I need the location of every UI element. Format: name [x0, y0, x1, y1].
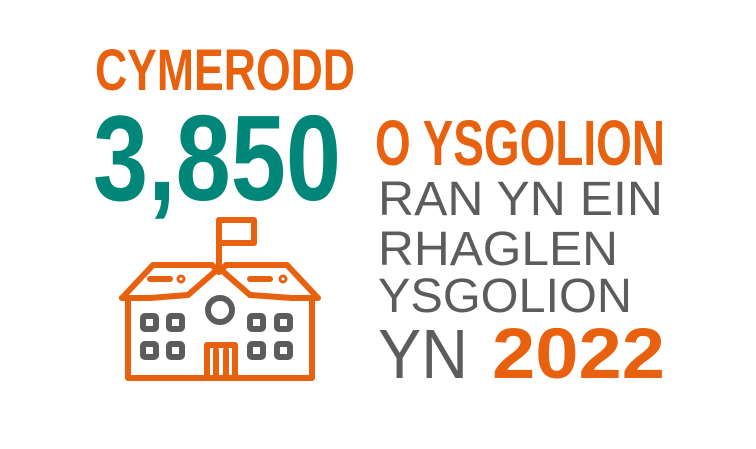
text block: description: 2022	[492, 315, 665, 394]
text block: description: YN	[378, 315, 468, 393]
number: 3,850: 3,850	[93, 90, 341, 226]
text block: description: RHAGLEN	[378, 223, 618, 276]
text block: description	[378, 173, 665, 394]
heading: CYMERODD: CYMERODD	[95, 38, 355, 103]
text block: description: RAN YN EIN	[378, 173, 663, 226]
icon: school building	[122, 220, 318, 378]
text block: description: YSGOLION	[378, 270, 632, 323]
